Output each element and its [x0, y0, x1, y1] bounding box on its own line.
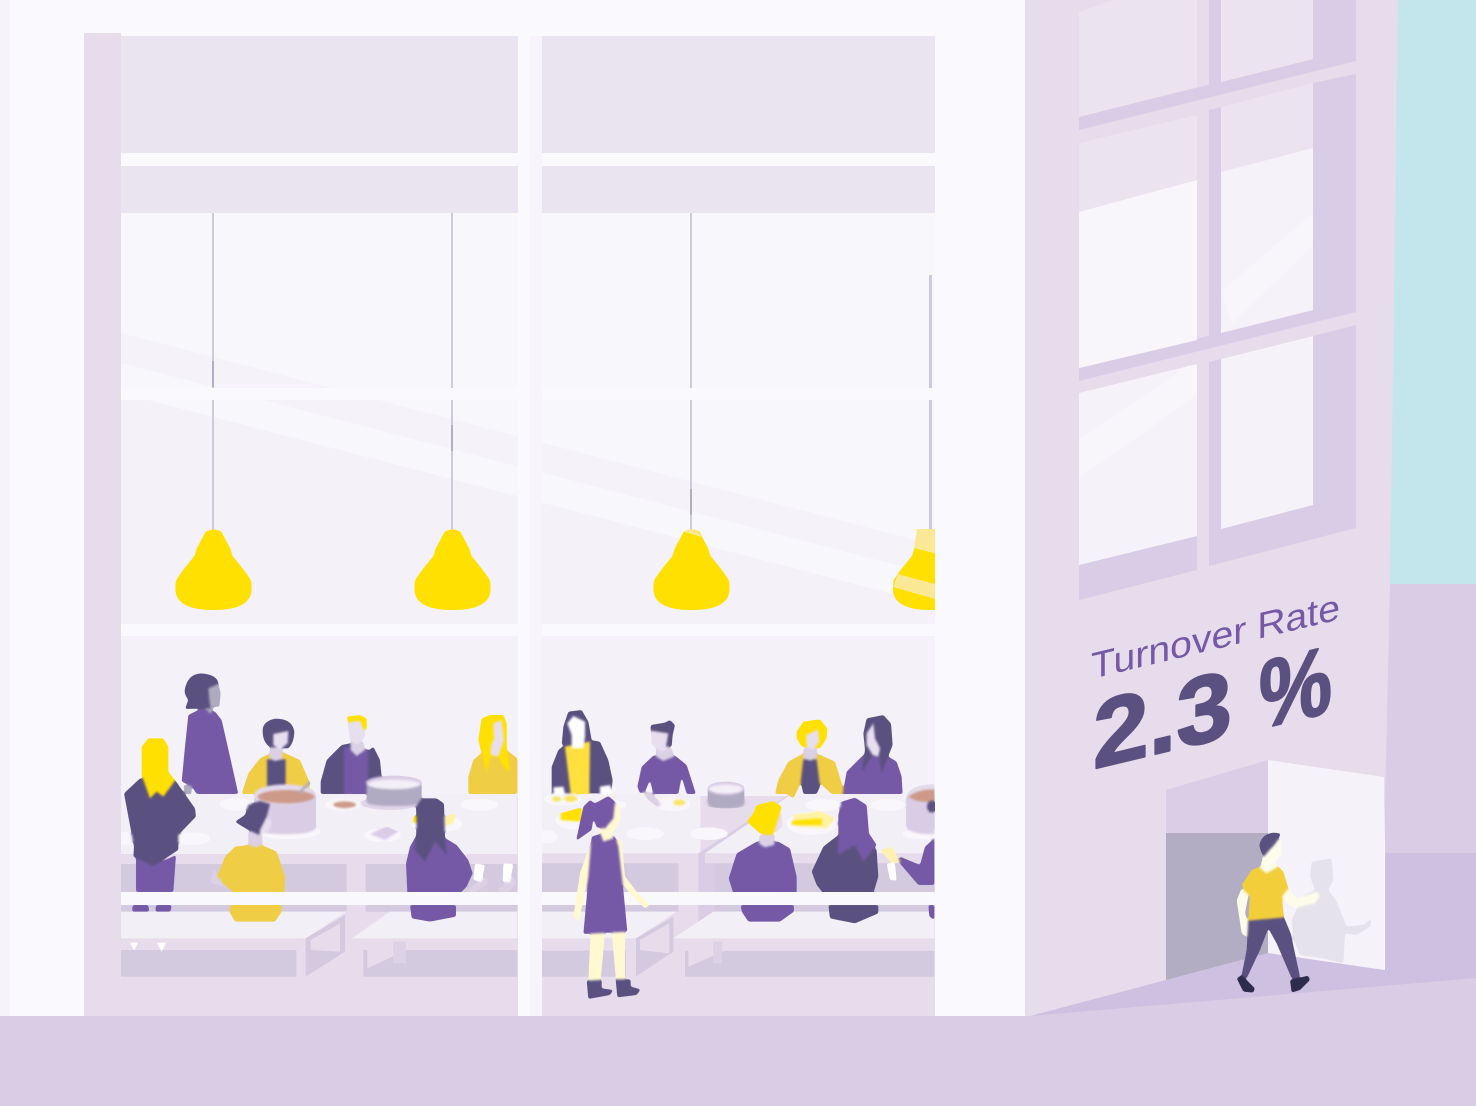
window panes — [1079, 0, 1313, 565]
seated blonde woman, back view — [729, 801, 797, 922]
ground in front of side wall — [1030, 953, 1476, 1018]
pot of soup at right edge — [902, 784, 952, 839]
seated woman in yellow jacket — [242, 719, 310, 794]
seated woman in dark jacket — [552, 710, 613, 795]
pot of soup — [254, 782, 321, 839]
upper floor window — [1079, 0, 1356, 600]
seated woman in yellow jacket — [775, 719, 845, 798]
standing woman in dark jacket — [124, 738, 196, 912]
seated woman with hair bun — [637, 720, 696, 807]
plates — [109, 798, 498, 845]
seated blonde woman — [468, 715, 517, 794]
seated man in dark hoodie — [321, 715, 382, 794]
background block — [1385, 584, 1476, 983]
plates — [536, 792, 906, 843]
people and dishes, left half — [109, 673, 517, 922]
girl standing in front of window — [573, 796, 650, 999]
people and dishes, right half — [536, 710, 952, 923]
street — [0, 978, 1476, 1106]
standing woman in purple — [182, 673, 238, 795]
right table and bench — [542, 794, 934, 977]
pendant lamp cords — [212, 213, 932, 530]
pendant lamps — [176, 529, 969, 610]
value: 2.3 % — [1093, 625, 1332, 790]
window reveals and mullions — [1079, 0, 1356, 600]
seated woman with purple hair, back view — [812, 798, 878, 923]
doorway — [1166, 760, 1384, 980]
seated woman in yellow, back view — [211, 801, 285, 922]
sky — [1390, 0, 1476, 584]
seated dark-haired woman, back view — [406, 798, 517, 922]
value: 2.3 %: % — [1259, 625, 1332, 750]
seated woman with long dark hair — [843, 715, 903, 794]
window mullions — [84, 36, 1025, 1020]
round cake — [703, 782, 749, 808]
label: Turnover Rate: Turnover Rate — [1091, 586, 1340, 687]
left table and bench — [121, 795, 517, 977]
man walking out of door — [1237, 833, 1372, 993]
window glass — [121, 213, 935, 1018]
side wall — [1025, 0, 1398, 1018]
diner at right edge — [880, 801, 936, 920]
value: 2.3 %: 2.3 — [1093, 649, 1232, 790]
building front facade — [0, 0, 1030, 1020]
round cake — [361, 776, 422, 810]
